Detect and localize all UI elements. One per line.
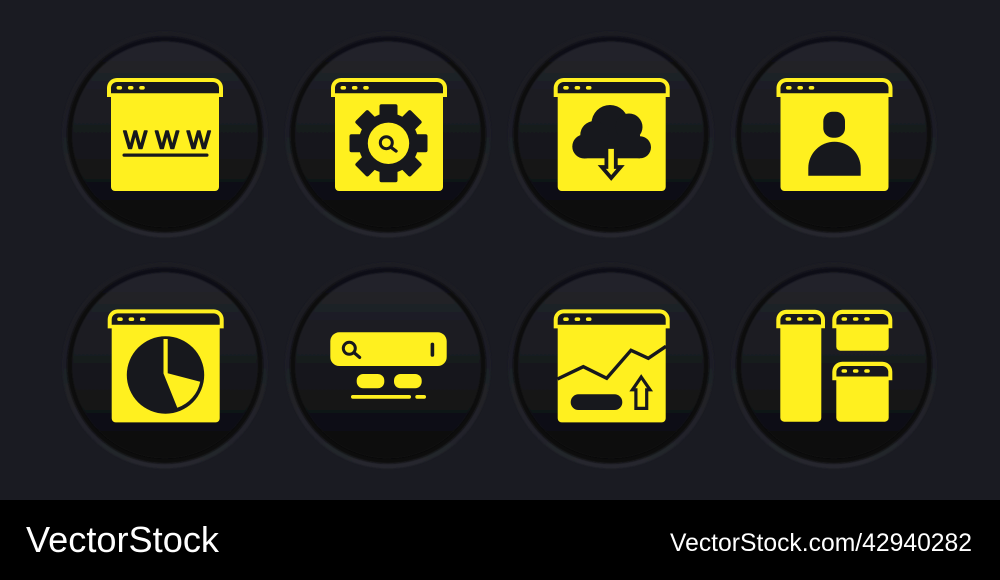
icon button: www browser window — [62, 32, 268, 238]
medium window — [832, 362, 892, 422]
icon button: browser gear search — [285, 32, 491, 238]
www label: WWW — [124, 126, 211, 154]
icon button: search bar — [285, 262, 491, 468]
download arrow — [602, 147, 621, 178]
tall window — [776, 310, 825, 422]
trend line — [558, 346, 666, 379]
user body — [808, 142, 861, 176]
image id: VectorStock.com/42940282 — [670, 530, 972, 557]
icon button: cloud download — [508, 32, 714, 238]
cloud — [572, 105, 651, 158]
footer bar — [0, 500, 1000, 580]
short window — [832, 310, 892, 351]
icon button: pie chart window — [62, 262, 268, 468]
buttons — [357, 374, 384, 388]
icon button: window layout — [731, 262, 937, 468]
pie chart — [127, 336, 204, 414]
gear — [350, 104, 428, 182]
icon button: growth chart window — [508, 262, 714, 468]
user head — [823, 112, 845, 138]
brand name: VectorStock — [26, 519, 220, 560]
up arrow — [632, 377, 650, 408]
icon button: user profile — [731, 32, 937, 238]
search field — [330, 332, 447, 366]
pill — [571, 394, 622, 410]
text lines — [351, 395, 411, 399]
